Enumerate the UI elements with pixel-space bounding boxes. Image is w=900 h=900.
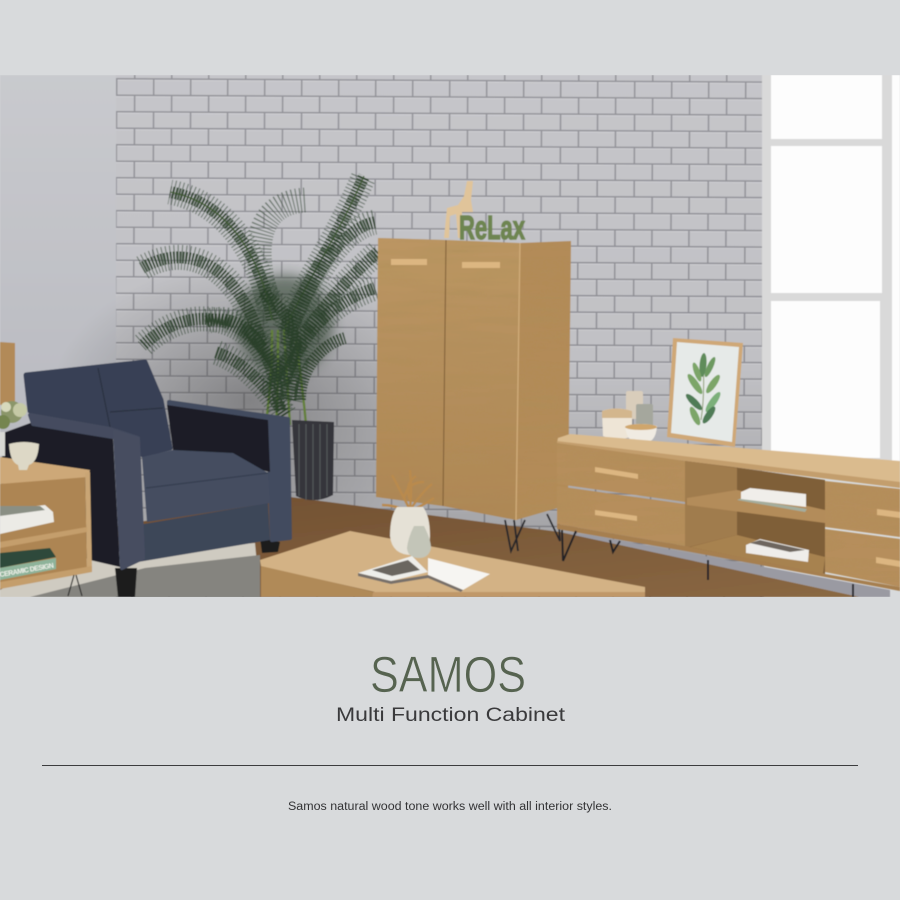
cabinet legs <box>505 512 560 551</box>
stems <box>266 330 306 425</box>
unit interior <box>685 460 825 574</box>
front-side edge <box>516 243 520 520</box>
door seam <box>443 240 446 506</box>
upper shelf <box>687 490 825 523</box>
white vase <box>390 507 430 555</box>
title: SAMOS <box>370 646 526 703</box>
near arm outer side <box>0 422 120 567</box>
coffee table <box>260 531 645 597</box>
bottom panel <box>557 524 900 591</box>
side table <box>0 401 92 596</box>
left upper drawer <box>557 443 685 502</box>
cabinet handles <box>391 259 500 268</box>
botanical print <box>684 353 723 427</box>
book stack upper <box>737 488 807 512</box>
left lower drawer <box>557 486 685 546</box>
divider <box>42 765 858 766</box>
cabinet side <box>516 241 571 520</box>
floor <box>0 497 860 597</box>
book stack lower <box>746 539 809 562</box>
near arm front <box>115 432 143 568</box>
lower shelf <box>690 535 825 574</box>
small grey vase <box>407 526 431 558</box>
centre divider <box>685 461 737 548</box>
TV unit <box>557 434 900 597</box>
near arm top <box>30 415 138 438</box>
brick wall <box>50 75 764 600</box>
room photo <box>0 75 900 600</box>
far arm <box>169 402 290 540</box>
picture frame <box>667 338 743 447</box>
plant pot <box>292 420 334 500</box>
backrest <box>26 362 170 455</box>
open magazine <box>358 556 490 592</box>
unit top <box>557 434 900 487</box>
cabinet <box>376 238 571 551</box>
fronds <box>142 176 378 415</box>
foliage mass <box>237 275 333 375</box>
books lower <box>0 548 56 568</box>
unit front edge <box>557 441 900 488</box>
seat base <box>138 503 270 562</box>
table front <box>261 565 373 597</box>
rug <box>0 543 260 597</box>
wooden giraffe ornament <box>444 181 473 238</box>
right upper drawer <box>825 481 900 537</box>
cabinet left door <box>376 238 446 506</box>
right lower drawer <box>825 529 900 587</box>
table interior <box>0 473 87 586</box>
window <box>762 75 900 475</box>
description: Samos natural wood tone works well with all interior styles. <box>288 801 612 813</box>
table side <box>85 472 92 572</box>
subtitle: Multi Function Cabinet <box>336 705 566 726</box>
ceramics <box>602 391 657 444</box>
books upper <box>0 505 54 534</box>
wooden shelf behind chair <box>0 342 15 405</box>
Relax sign: ReLax <box>459 209 525 246</box>
book title: CERAMIC DESIGN <box>0 563 55 579</box>
cup <box>9 442 39 470</box>
cabinet right door <box>443 240 520 520</box>
left plain wall <box>0 75 116 458</box>
table shelf <box>0 527 87 548</box>
unit legs <box>562 530 853 597</box>
far arm inner <box>167 405 270 472</box>
drawer handles <box>595 467 900 567</box>
armchair <box>0 362 290 597</box>
table top <box>0 457 90 484</box>
dried flowers <box>382 470 434 512</box>
chair back legs <box>260 538 280 553</box>
table top <box>260 531 645 592</box>
baseboard behind unit <box>560 532 890 597</box>
table legs <box>68 575 82 596</box>
table bottom <box>0 566 92 589</box>
flowers <box>0 401 27 456</box>
plant <box>142 176 378 500</box>
seat cushion <box>142 450 270 522</box>
